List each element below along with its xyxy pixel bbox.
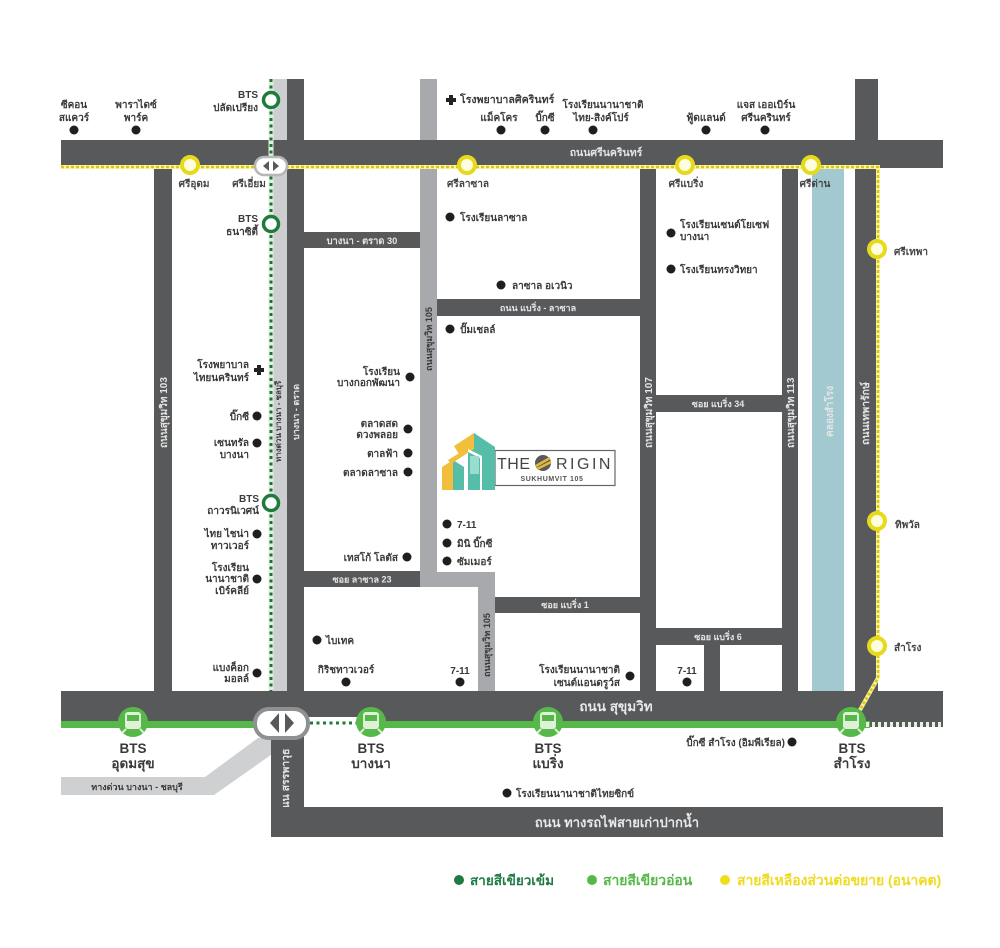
poi labels bangna-trad east: บางกอกพัฒนา: [337, 377, 400, 389]
road: soi lasalle 23: [304, 571, 420, 587]
road: soi bearing 34: [656, 395, 782, 412]
road: light grey expressway along bangna-trad: ทางด่วน บางนา - ชลบุรี: [273, 380, 284, 462]
poi labels bangna-trad west: ไทย ไชน่า: [203, 527, 249, 540]
yellow stop names: ศรีด่าน: [800, 178, 830, 190]
poi labels central: ปั๊มเชลล์: [460, 322, 495, 336]
poi labels central: โรงเรียนทรงวิทยา: [679, 263, 758, 276]
poi labels near project: มินิ บิ๊กซี: [457, 536, 493, 550]
yellow stop names: สำโรง: [894, 641, 921, 654]
station names sukhumvit line: [111, 741, 870, 772]
road: sukhumvit: ถนน สุขุมวิท: [579, 699, 653, 715]
canal: khlong samrong: [812, 168, 844, 691]
legend: สายสีเหลืองส่วนต่อขยาย (อนาคต): [737, 872, 941, 888]
yellow stop names: ทิพวัล: [895, 519, 920, 531]
road: bangna-trad 30: [304, 232, 420, 248]
yellow stop names: ศรีเทพา: [894, 246, 928, 258]
road: soi bearing 34: ซอย แบริ่ง 34: [692, 397, 744, 409]
poi labels near project: เซนต์แอนดรูว์ส: [554, 677, 621, 690]
yellow stop names: ศรีเอี่ยม: [232, 176, 266, 190]
poi labels central: โรงเรียนเซนต์โยเซฟ: [679, 218, 769, 231]
poi labels north of srinakarin: โรงพยาบาลศิครินทร์: [459, 93, 555, 106]
station icon: samrong: [836, 707, 866, 737]
poi labels bangna-trad west: โรงเรียน: [211, 561, 249, 574]
station names sukhumvit line: อุดมสุข: [111, 756, 155, 772]
road: soi lasalle 23: ซอย ลาซาล 23: [332, 574, 392, 584]
poi labels central: ลาซาล อเวนิว: [512, 280, 573, 292]
road: sukhumvit 113: [782, 168, 798, 691]
canal: khlong samrong: คลองสำโรง: [823, 386, 836, 437]
poi labels bangna-trad west: ทาวเวอร์: [211, 540, 250, 552]
road: sukhumvit 103: [154, 168, 172, 691]
station names sukhumvit line: บางนา: [351, 756, 391, 771]
dark green stop names: BTS: [238, 90, 258, 101]
poi labels central: โรงเรียนลาซาล: [459, 211, 527, 224]
road: sukhumvit 105: ถนนสุขุมวิท 105: [482, 613, 493, 677]
road: soi bearing 6: ซอย แบริ่ง 6: [694, 630, 742, 642]
poi labels north of srinakarin: ไทย-สิงค์โปร์: [572, 111, 629, 124]
station names sukhumvit line: BTS: [534, 741, 562, 756]
poi labels near project: โรงเรียนนานาชาติ: [538, 663, 620, 676]
station: yellow stops: [182, 157, 885, 654]
road: bearing-lasalle: [437, 299, 640, 316]
light green extension dashes east of samrong: [866, 722, 943, 727]
icon: hospital crosses: [254, 95, 456, 375]
road: bangna-trad: [287, 79, 304, 729]
poi labels north of srinakarin: ซีคอน: [61, 99, 87, 111]
road: sanphawut: ถนน สรรพาวุธ: [280, 749, 293, 815]
logo: the origin sukhumvit 105: [442, 433, 615, 490]
station names sukhumvit line: สำโรง: [834, 754, 870, 771]
road: sukhumvit 107: ถนนสุขุมวิท 107: [643, 377, 655, 448]
poi labels bangna-trad west: เซนทรัล: [214, 437, 249, 449]
poi labels bangna-trad west: [193, 358, 250, 685]
dark green line: [268, 79, 274, 691]
poi labels north of srinakarin: พาราไดซ์: [115, 98, 157, 111]
station names sukhumvit line: BTS: [120, 741, 146, 756]
poi labels north of srinakarin: พาร์ค: [124, 112, 148, 124]
yellow line: [61, 167, 878, 710]
logo wordmark: RIGIN: [556, 456, 613, 473]
station icon: bang na: [356, 707, 386, 737]
road: expressway bangna-chonburi ramp: ทางด่วน บางนา - ชลบุรี: [91, 782, 183, 793]
road: old paknam railway: [271, 807, 943, 837]
dark green stop names: BTS: [239, 494, 259, 505]
logo buildings: [442, 433, 495, 490]
poi labels north of srinakarin: โรงเรียนนานาชาติ: [562, 98, 643, 111]
light green line: [61, 717, 870, 729]
yellow stop names: ศรีแบริ่ง: [669, 176, 704, 190]
interchange small: [255, 157, 287, 175]
road: sukhumvit 107: [640, 168, 656, 691]
road: sukhumvit 103: ถนนสุขุมวิท 103: [158, 377, 170, 448]
poi markers: [70, 126, 796, 798]
road: srinakarin: ถนนศรีนครินทร์: [570, 146, 643, 159]
poi labels bangna-trad east: [318, 365, 470, 677]
dark green stop names: ถาวรนิเวศน์: [207, 505, 259, 517]
logo frame: [495, 450, 615, 486]
poi labels near project: โรงเรียนนานาชาติไทยซิกข์: [515, 787, 634, 800]
road: old paknam railway: ถนน ทางรถไฟสายเก่าปากน้ำ: [535, 812, 699, 830]
station names sukhumvit line: BTS: [838, 741, 866, 756]
poi labels bangna-trad east: เทสโก้ โลตัส: [344, 551, 399, 564]
road: thepharak: [855, 79, 878, 691]
station names sukhumvit line: แบริ่ง: [532, 753, 564, 771]
road: soi bearing 6: [656, 628, 782, 645]
station icon: bearing: [533, 707, 563, 737]
road: thepharak: ถนนเทพารักษ์: [859, 382, 872, 445]
road: sukhumvit: [61, 691, 943, 727]
poi labels bangna-trad west: บิ๊กซี: [230, 409, 249, 423]
logo wordmark: SUKHUMVIT 105: [520, 476, 584, 483]
road: srinakarin: [61, 140, 943, 168]
dark green stop names: BTS: [238, 214, 258, 225]
poi labels bangna-trad west: แบงค็อก: [213, 660, 249, 674]
yellow stop names: ศรีลาซาล: [447, 178, 489, 190]
logo wordmark: THE: [497, 456, 530, 473]
poi labels north of srinakarin: ศรีนครินทร์: [741, 112, 791, 124]
yellow stop names: ศรีอุดม: [179, 178, 209, 190]
interchange large: [255, 709, 308, 738]
poi labels bangna-trad west: โรงพยาบาล: [196, 358, 249, 371]
dark green stop names: ปลัดเปรียง: [213, 102, 258, 114]
poi labels near project: บิ๊กซี สำโรง (อิมพีเรียล): [686, 735, 785, 749]
poi labels near project: [457, 520, 785, 800]
poi labels bangna-trad west: นานาชาติ: [205, 573, 249, 585]
legend: [454, 872, 941, 888]
road: bangna-trad: บางนา - ตราด: [291, 384, 301, 440]
road: light grey expressway along bangna-trad: [272, 79, 288, 714]
poi labels north of srinakarin: สแควร์: [59, 112, 90, 124]
poi labels bangna-trad east: ตลาดลาซาล: [343, 468, 398, 479]
road: sukhumvit 105: ถนนสุขุมวิท 105: [424, 307, 435, 371]
road: bearing-lasalle: ถนน แบริ่ง - ลาซาล: [500, 301, 576, 313]
legend: สายสีเขียวเข้ม: [470, 873, 554, 888]
road: soi bearing 1: [495, 597, 640, 613]
poi labels bangna-trad east: 7-11: [450, 666, 470, 677]
poi labels central: บางนา: [680, 232, 709, 243]
poi labels north of srinakarin: [59, 93, 795, 125]
poi labels bangna-trad west: เบิร์คลีย์: [215, 585, 249, 597]
poi labels near project: 7-11: [457, 520, 477, 531]
poi labels north of srinakarin: บิ๊กซี: [535, 110, 555, 124]
poi labels central: [459, 211, 769, 336]
road: soi bearing 1: ซอย แบริ่ง 1: [541, 598, 589, 610]
station names sukhumvit line: BTS: [358, 741, 384, 756]
poi labels bangna-trad west: มอลล์: [224, 673, 249, 685]
road: small lane: [704, 645, 720, 691]
poi labels bangna-trad east: ตลาดสด: [361, 419, 398, 430]
dark green stop names: ธนาซิตี้: [226, 224, 259, 238]
poi labels bangna-trad east: ตาลฟ้า: [367, 448, 398, 460]
road: sanphawut: [271, 722, 304, 837]
road: expressway bangna-chonburi ramp: [61, 738, 295, 795]
poi labels bangna-trad east: ดวงพลอย: [356, 430, 398, 441]
logo wordmark: [497, 455, 613, 483]
poi labels near project: ซัมเมอร์: [457, 556, 492, 568]
poi labels bangna-trad east: โรงเรียน: [362, 365, 400, 378]
poi labels bangna-trad west: ไทยนครินทร์: [193, 371, 250, 384]
poi labels bangna-trad west: บางนา: [220, 450, 249, 461]
poi labels north of srinakarin: แจส เออเบิร์น: [737, 99, 795, 111]
poi labels north of srinakarin: ฟู้ดแลนด์: [686, 112, 726, 125]
poi labels bangna-trad east: ไบเทค: [325, 634, 354, 647]
dark green stop names: [207, 90, 259, 517]
road: bangna-trad 30: บางนา - ตราด 30: [327, 236, 397, 246]
poi labels near project: 7-11: [677, 666, 697, 677]
road: sukhumvit 105: [420, 79, 495, 691]
yellow stop names: [179, 176, 928, 654]
station icon: udom suk: [118, 707, 148, 737]
poi labels north of srinakarin: แม็คโคร: [480, 110, 518, 124]
legend: สายสีเขียวอ่อน: [603, 872, 693, 888]
road: sukhumvit 113: ถนนสุขุมวิท 113: [785, 377, 797, 448]
station: dark green stops: [264, 92, 278, 510]
poi labels bangna-trad east: กิริชทาวเวอร์: [318, 664, 375, 676]
